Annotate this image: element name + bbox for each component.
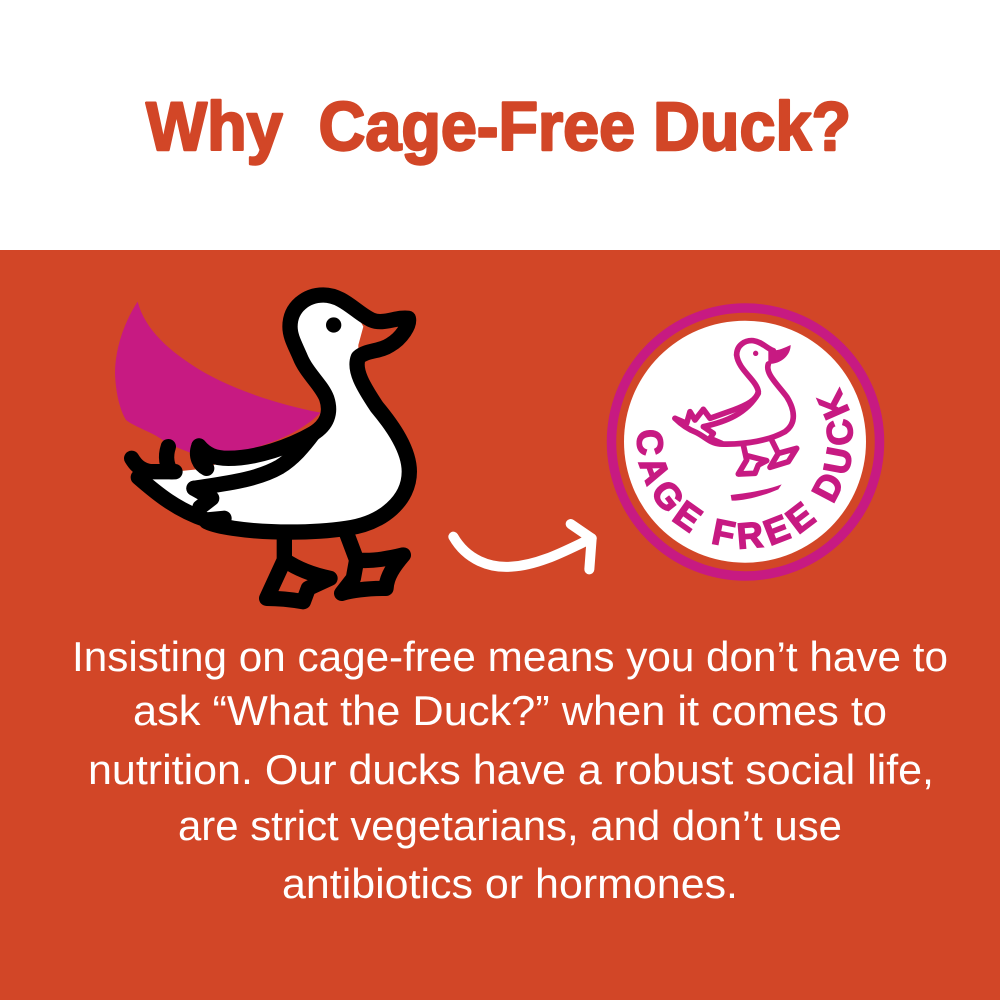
body text: ask “What the Duck?” when it comes to: [133, 687, 887, 734]
badge duck lines: [675, 341, 797, 474]
duck eye: [326, 317, 341, 333]
panel: orange background: [0, 250, 1000, 1000]
badge duck icon: [675, 341, 797, 501]
body text: nutrition. Our ducks have a robust social life,: [88, 746, 934, 793]
title: Why Cage-Free Duck?: [146, 88, 851, 165]
badge curved text: [638, 390, 853, 548]
badge brush mark: [731, 484, 782, 501]
body text: are strict vegetarians, and don’t use: [178, 802, 842, 849]
body text: Insisting on cage-free means you don’t have to: [72, 633, 948, 680]
badge: cage free duck stamp: [606, 303, 884, 581]
badge white disc: [624, 321, 866, 563]
body text: [72, 633, 948, 907]
badge pink ring: [612, 308, 880, 576]
badge duck bill: [768, 345, 791, 364]
body text: antibiotics or hormones.: [282, 860, 738, 907]
badge duck eye: [753, 351, 758, 356]
icon: large duck with pink wing: [115, 295, 409, 602]
duck outline: [132, 295, 409, 602]
duck body fill: [138, 295, 409, 532]
badge: cage free duck stamp: CAGE FREE DUCK: [636, 386, 854, 550]
pink wing: [115, 302, 321, 453]
arrow: [453, 524, 592, 569]
